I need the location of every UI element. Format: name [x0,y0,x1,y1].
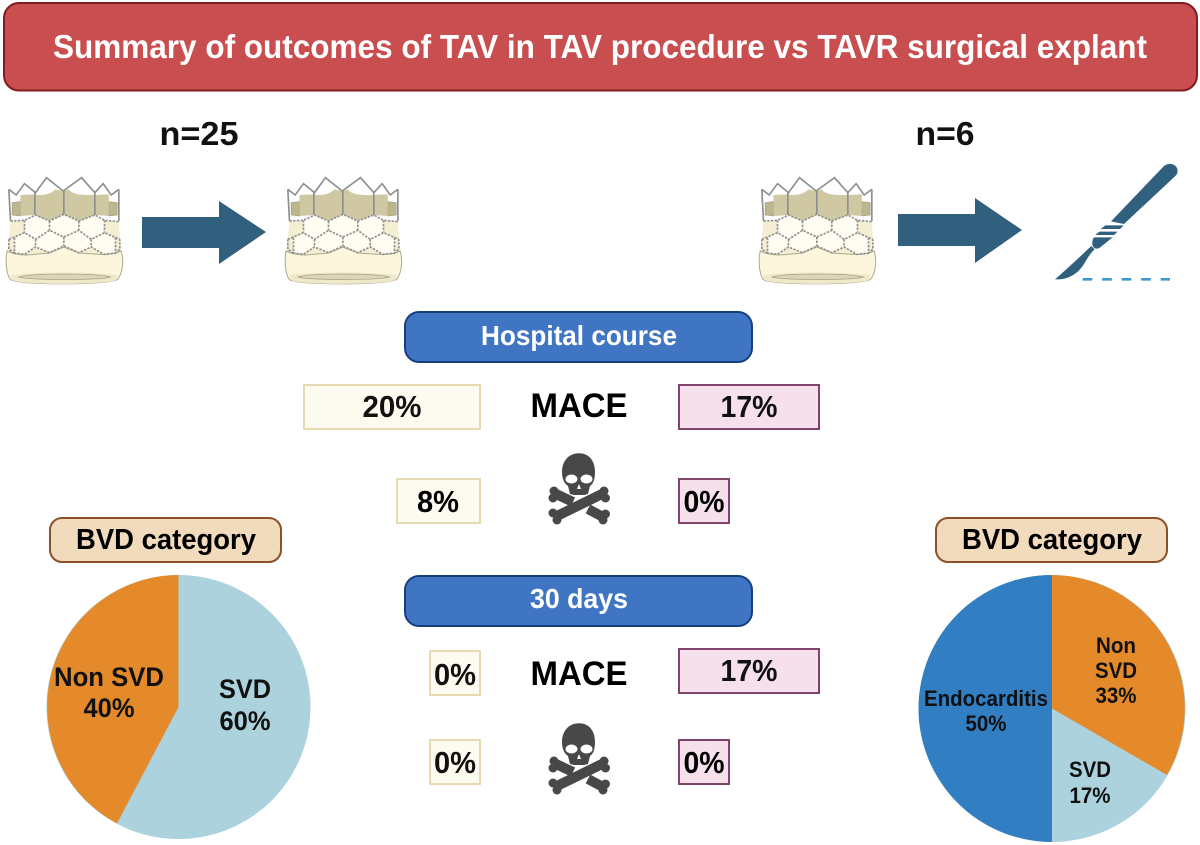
label: Non SVD 33%: Non [1096,633,1136,658]
icon: valve, index TAV [6,178,123,284]
icon: skull and crossbones, 30 days [548,723,610,794]
label: SVD 17%: 17% [1070,783,1110,808]
stat: death hospital TAV in TAV 8%: 8% [417,484,459,519]
label: SVD 60%: 60% [220,706,270,736]
label: SVD 60%: SVD [219,674,271,704]
heading: BVD category left: BVD category [76,524,256,556]
stat: death 30 days explant 0%: 0% [684,745,724,780]
title banner [4,3,1197,90]
stat: death 30 days TAV in TAV 0%: 0% [434,745,476,780]
heading: 30 days: 30 days [530,583,628,614]
label: Non SVD 33%: SVD [1095,658,1137,683]
label: SVD 17% [1069,757,1111,808]
label: Non SVD 40%: 40% [84,693,134,723]
stat: MACE hospital TAV in TAV 20%: 20% [362,389,422,424]
heading: BVD category right: BVD category [962,524,1142,556]
arrow: TAV in TAV [142,201,266,264]
pie chart: left [46,575,310,839]
label: n=25: n=25 [160,115,238,152]
label: Non SVD 33%: 33% [1096,683,1136,708]
icon: valve, explant group [759,178,876,284]
stat: MACE hospital TAV in TAV 20% [304,385,480,429]
icon: skull and crossbones, hospital [548,453,610,524]
label: Non SVD 40%: Non SVD [54,662,164,692]
label: Endocarditis 50%: 50% [966,711,1006,736]
heading: BVD category left [50,518,281,562]
stat: death hospital TAV in TAV 8% [397,479,480,523]
icon: valve, implanted TAV [285,178,402,284]
title banner: Summary of outcomes of TAV in TAV procedure vs TAVR surgical explant [53,28,1147,65]
label: MACE 30 days: MACE [530,655,628,693]
stat: MACE 30 days explant 17%: 17% [720,653,778,688]
heading: BVD category right [936,518,1167,562]
label: Non SVD 33% [1095,633,1137,708]
icon: scalpel [1055,164,1178,279]
label: MACE hospital: MACE [530,387,628,425]
stat: MACE hospital explant 17% [679,385,819,429]
label: Endocarditis 50% [924,686,1048,736]
arrow: surgical explant [898,198,1022,263]
stat: MACE 30 days TAV in TAV 0%: 0% [434,657,476,692]
label: n=6: n=6 [916,115,974,152]
label: Non SVD 40% [54,662,164,723]
label: SVD 60% [219,674,271,736]
heading: 30 days [405,576,752,626]
label: Endocarditis 50%: Endocarditis [924,686,1048,711]
pie chart: right [918,575,1186,842]
label: SVD 17%: SVD [1069,757,1111,782]
stat: MACE 30 days explant 17% [679,649,819,693]
stat: death hospital explant 0%: 0% [684,484,724,519]
heading: Hospital course: Hospital course [481,320,677,351]
stat: MACE hospital explant 17%: 17% [720,389,778,424]
heading: Hospital course [405,312,752,362]
